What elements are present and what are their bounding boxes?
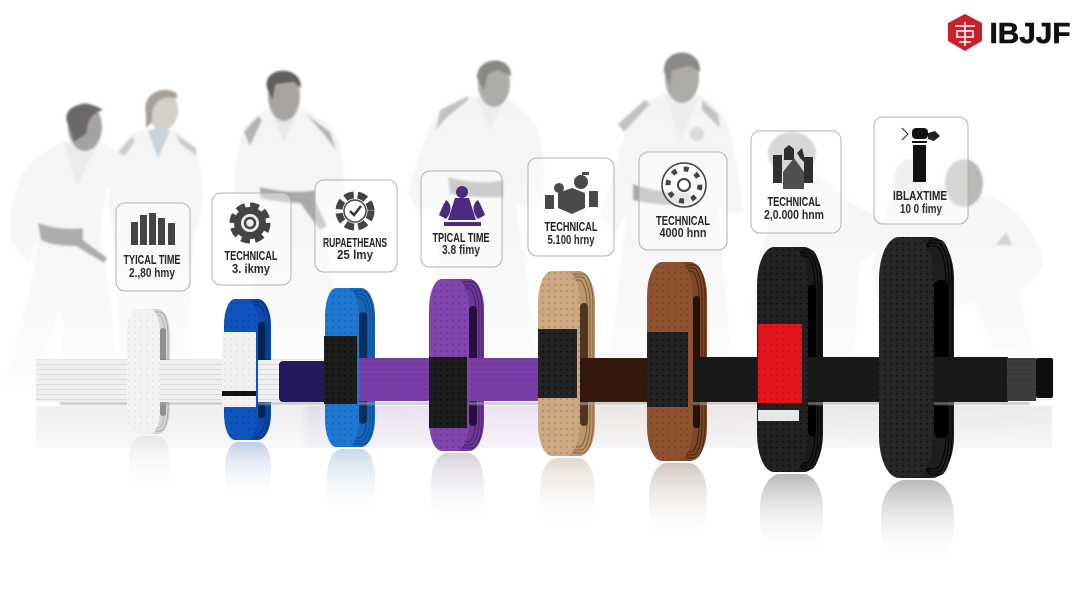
label: [656, 214, 710, 240]
blue coil: [227, 299, 271, 440]
IBJJF logo: [948, 14, 1070, 51]
black section: [659, 357, 1008, 402]
athlete: man centre-left: [234, 71, 344, 370]
purple belt: [429, 279, 469, 451]
label: TECHNICAL: [768, 195, 821, 209]
roll reflections: [129, 436, 954, 564]
card 6: [639, 152, 727, 250]
label: TECHNICAL: [224, 249, 278, 263]
card 8: [874, 117, 968, 224]
red-bar black coil: [762, 247, 823, 472]
light blue belt black bar: [324, 336, 357, 404]
label: RUPAETHEANS: [323, 236, 387, 250]
label: [432, 231, 490, 257]
card 2: [212, 193, 291, 285]
brown coil: [651, 262, 707, 461]
label: 10 0 fimy: [900, 202, 942, 216]
card 4: [421, 171, 502, 267]
info cards: [116, 117, 968, 291]
card 5: [528, 158, 614, 256]
card 1: [116, 203, 190, 291]
label: [124, 253, 180, 280]
card 7: [751, 131, 841, 233]
purple section: [339, 358, 549, 401]
athlete: grappling pair: [753, 132, 1044, 370]
label: 3.8 fimy: [442, 243, 480, 257]
blue belt white bar: [222, 332, 256, 407]
background athletes: [2, 52, 1044, 392]
blue belt: [222, 299, 258, 440]
card 3: [315, 180, 397, 272]
white stripe: [758, 410, 799, 421]
black coil: [885, 237, 954, 478]
icon: gear: [233, 206, 267, 240]
black belt: [879, 237, 934, 478]
belt coil backs: [130, 237, 954, 478]
label: [323, 236, 387, 262]
icon: hexagon cluster: [545, 172, 598, 214]
light blue coil: [328, 288, 375, 447]
athlete: man left: [2, 103, 166, 392]
athlete: man centre: [408, 60, 544, 360]
tan belt: [538, 271, 580, 456]
athlete: woman: [109, 90, 203, 392]
icon: meditating figure: [439, 186, 485, 226]
label: 25 lmy: [337, 248, 373, 262]
label: 5.100 hrny: [548, 233, 595, 247]
grey segment: [1007, 358, 1036, 401]
long belt: [36, 357, 1053, 405]
brown section: [549, 358, 659, 402]
black tip: [1036, 358, 1053, 398]
tan belt black bar: [538, 329, 577, 398]
navy section: [279, 361, 339, 402]
label: TECHNICAL: [544, 220, 598, 234]
label: TECHNICAL: [656, 214, 710, 228]
white section: [36, 360, 288, 402]
logo hexagon: [948, 14, 982, 51]
brown belt: [647, 262, 693, 461]
label: 2,0.000 hnm: [764, 208, 824, 222]
label: 2.,80 hmy: [129, 266, 175, 280]
label: 4000 hnn: [660, 226, 706, 240]
tan coil: [542, 271, 595, 456]
icon: black belt knot column: [902, 128, 940, 182]
brown belt black bar: [647, 332, 688, 407]
purple coil: [433, 279, 484, 451]
label: 3. ikmy: [232, 262, 270, 276]
label: IBLAXTIME: [893, 189, 947, 203]
red bar: [758, 324, 802, 403]
floor belt reflection: [36, 406, 1052, 448]
icon: towers: [773, 145, 813, 189]
red-bar black belt: [757, 247, 808, 472]
icon: bars: [131, 213, 175, 245]
belt front bands: [127, 237, 934, 478]
label: TPICAL TIME: [432, 231, 490, 245]
logo text: IBJJF: [990, 18, 1070, 50]
label: [764, 195, 824, 222]
label: [224, 249, 278, 276]
white coil: [130, 309, 170, 434]
icon: gear check: [339, 195, 371, 227]
purple belt black bar: [429, 357, 467, 428]
icon: disc: [662, 163, 706, 207]
label: [544, 220, 598, 247]
label: [893, 189, 947, 216]
white belt: [127, 309, 160, 434]
light blue belt: [324, 288, 359, 447]
label: TYICAL TIME: [124, 253, 180, 267]
athlete: man centre-right: [602, 52, 743, 370]
